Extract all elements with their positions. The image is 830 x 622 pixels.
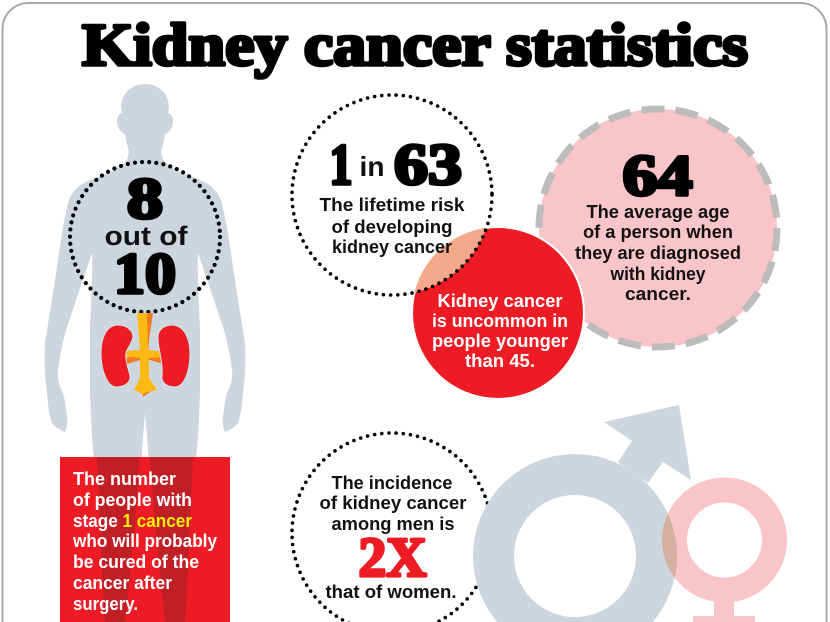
incidence text: of kidney cancer	[320, 493, 466, 513]
male ring	[494, 474, 656, 622]
icon: male symbol	[494, 405, 691, 622]
incidence text	[320, 473, 466, 602]
incidence text: that of women.	[326, 582, 456, 602]
panel: uncommon under 45	[412, 227, 584, 399]
overlap with lifetime risk circle	[414, 228, 486, 292]
lifetime risk text	[320, 195, 466, 257]
lifetime risk text: kidney cancer	[332, 237, 452, 257]
lifetime risk text: of developing	[332, 217, 452, 237]
dotted circle	[70, 162, 220, 312]
female cross	[693, 600, 755, 622]
icon: female symbol	[662, 478, 787, 622]
red circle text: Kidney cancer	[438, 291, 562, 311]
callout text: stage 1 cancer	[73, 511, 192, 531]
callout text: cancer after	[73, 573, 172, 593]
2X figure: 2X	[358, 527, 426, 589]
left kidney	[101, 325, 133, 387]
right kidney	[158, 325, 190, 387]
panel: average age 64	[539, 109, 777, 347]
red box	[60, 457, 230, 622]
callout text: be cured of the	[73, 552, 199, 572]
big number 10: 10	[114, 241, 176, 306]
panel: lifetime risk 1 in 63	[292, 95, 492, 295]
in label: in	[360, 151, 384, 182]
number 63: 63	[394, 132, 462, 197]
panel: 8 out of 10	[70, 162, 220, 312]
average age text: they are diagnosed	[575, 243, 741, 263]
average age text: with kidney	[610, 264, 706, 284]
icon: kidneys	[101, 313, 190, 397]
callout text	[72, 469, 217, 614]
dotted circle	[292, 433, 492, 622]
average age text	[575, 202, 741, 304]
dashed pink circle	[539, 109, 777, 347]
ureters	[140, 313, 153, 397]
red circle	[412, 227, 584, 399]
average age text: The average age	[586, 202, 730, 222]
big number 8: 8	[127, 166, 163, 231]
incidence text: among men is	[332, 514, 454, 534]
red circle text: than 45.	[465, 351, 535, 371]
human body silhouette	[45, 84, 245, 622]
lifetime risk text: The lifetime risk	[320, 195, 466, 215]
red circle text: people younger	[432, 331, 568, 351]
male arrow	[604, 405, 691, 483]
legs seen through box	[97, 457, 193, 622]
red circle text: is uncommon in	[432, 311, 568, 331]
callout text: of people with	[73, 490, 192, 510]
average age text: cancer.	[625, 284, 691, 304]
out of label: out of	[104, 221, 189, 251]
callout text: The number	[73, 469, 176, 489]
overlap with male ring	[662, 514, 677, 578]
incidence text: The incidence	[332, 473, 452, 493]
average age text: of a person when	[583, 222, 733, 242]
dotted circle	[292, 95, 492, 295]
title: Kidney cancer statistics	[82, 12, 748, 78]
panel: stage 1 cure callout	[60, 457, 230, 622]
female ring	[674, 490, 774, 590]
panel: incidence among men	[292, 433, 492, 622]
callout text: surgery.	[73, 594, 138, 614]
callout text: who will probably	[72, 531, 217, 551]
number 1: 1	[330, 132, 352, 197]
red circle text	[432, 291, 568, 371]
number 64: 64	[622, 143, 692, 208]
